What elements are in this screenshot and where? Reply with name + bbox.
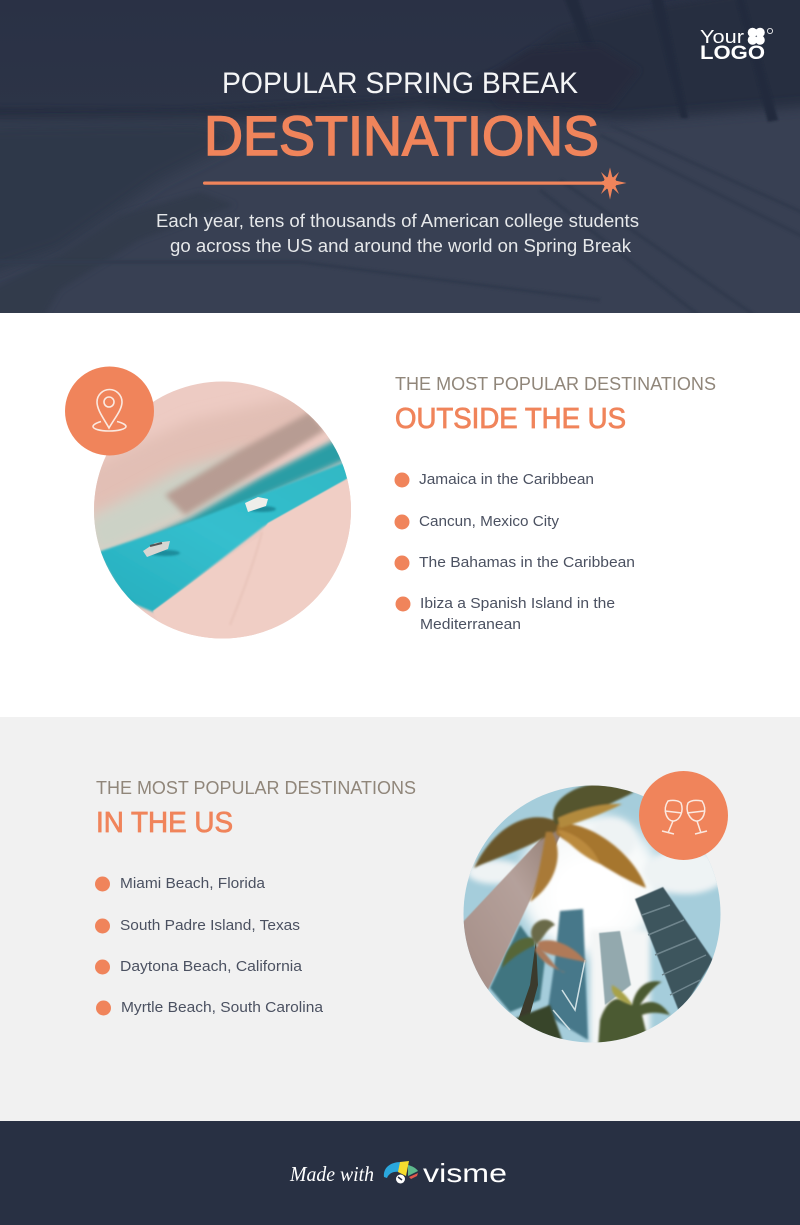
panel: outside the US xyxy=(65,366,716,638)
logo: LOGO xyxy=(700,43,765,64)
list: South Padre Island, Texas xyxy=(120,917,300,934)
large palm trunk xyxy=(460,826,562,990)
photo: aerial beach with boats xyxy=(94,382,351,638)
list: Cancun, Mexico City xyxy=(419,513,559,530)
list: Miami Beach, Florida xyxy=(120,875,266,892)
panel: in the US xyxy=(0,717,800,1121)
heading: THE MOST POPULAR DESTINATIONS xyxy=(96,778,416,798)
title line 1: POPULAR SPRING BREAK xyxy=(222,67,578,100)
list: Ibiza a Spanish Island in the xyxy=(420,595,615,612)
boat 1 xyxy=(245,497,276,512)
list: Jamaica in the Caribbean xyxy=(419,471,594,488)
logo: Your xyxy=(700,27,744,47)
small palms xyxy=(498,920,670,1048)
subheading: IN THE US xyxy=(96,807,233,839)
heading: THE MOST POPULAR DESTINATIONS xyxy=(395,374,716,394)
panel: footer xyxy=(0,1121,800,1225)
list xyxy=(394,471,635,633)
header background: darkened beach photo xyxy=(0,0,800,340)
subtitle: go across the US and around the world on Spring Break xyxy=(170,236,632,256)
towers xyxy=(490,887,713,1040)
icon badge: wine glasses xyxy=(639,771,728,860)
visme wordmark: visme xyxy=(423,1158,507,1188)
icon: visme logo xyxy=(384,1161,418,1184)
icon badge: location pin xyxy=(65,366,154,456)
photo: palm trees and towers xyxy=(460,783,727,1050)
list: Daytona Beach, California xyxy=(120,958,303,975)
list: The Bahamas in the Caribbean xyxy=(419,554,635,571)
subtitle: Each year, tens of thousands of American college students xyxy=(156,211,639,231)
list: Mediterranean xyxy=(420,616,521,633)
logo xyxy=(700,27,773,64)
divider line with star xyxy=(203,168,626,200)
large palm fronds xyxy=(474,783,646,902)
panel: header xyxy=(0,0,800,340)
title line 2: DESTINATIONS xyxy=(204,104,599,167)
made with text: Made with xyxy=(289,1162,374,1186)
subheading: OUTSIDE THE US xyxy=(395,403,626,435)
list xyxy=(95,875,324,1016)
boat 2 xyxy=(143,541,180,557)
list: Myrtle Beach, South Carolina xyxy=(121,999,324,1016)
subtitle xyxy=(156,211,639,256)
